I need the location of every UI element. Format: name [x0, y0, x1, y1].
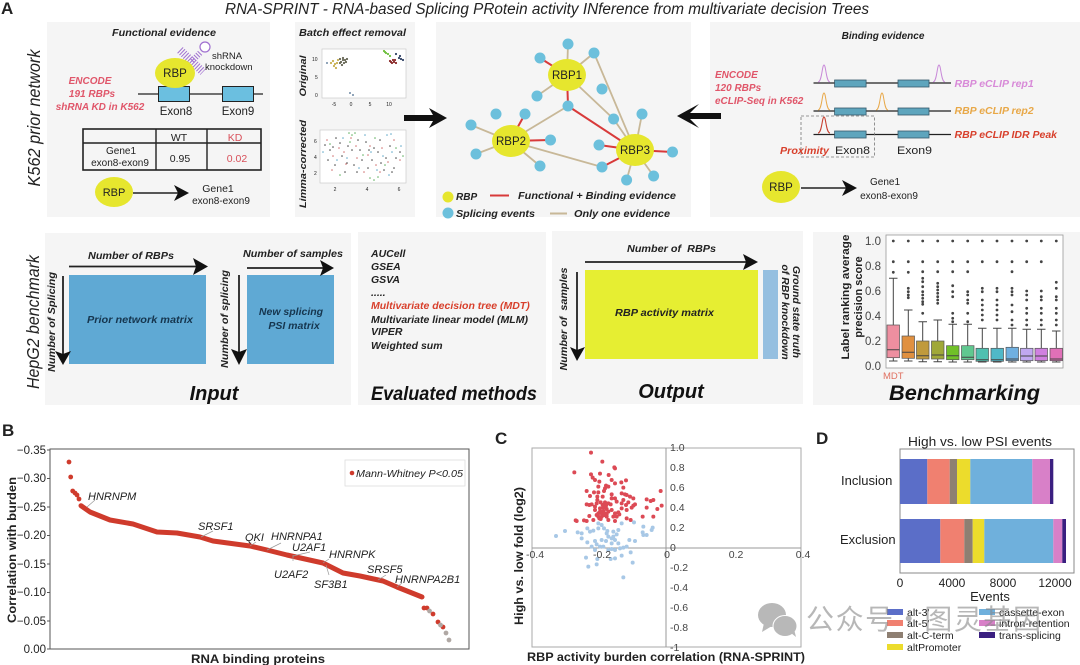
- scatter: original: 10: [312, 57, 318, 63]
- arrow: number of samples: Number of samples: [558, 267, 570, 370]
- method list: AUCell: [370, 248, 407, 260]
- arrow: number of splicing (right): [220, 270, 247, 368]
- arrow: number of samples: [558, 267, 585, 370]
- x axis ticks: 0: [664, 549, 670, 561]
- legend: alt-3': [907, 607, 929, 619]
- x axis label: Events: [970, 589, 1010, 604]
- method list: Weighted sum: [371, 340, 443, 352]
- y axis ticks: −0.05: [17, 616, 46, 628]
- y axis ticks: 0: [670, 542, 676, 554]
- scatter: limma-corrected: 4: [314, 155, 317, 161]
- panel: batch effect removal: [295, 22, 415, 217]
- ENCODE note: 120 RBPs: [715, 83, 762, 94]
- icon: chat bubbles: [758, 603, 797, 637]
- boxplot: [886, 235, 1063, 368]
- RBP3 node: RBP3: [620, 145, 650, 157]
- heading: benchmarking: Benchmarking: [889, 382, 1040, 405]
- arrow: number of splicing (left): Number of Splicing: [47, 272, 58, 372]
- arrow: number of samples: [243, 248, 343, 276]
- row label: HepG2 benchmark: HepG2 benchmark: [23, 254, 43, 389]
- panel: functional evidence: [47, 22, 270, 217]
- panel: functional evidence: Functional evidence: [112, 28, 216, 39]
- arrow: left to network: [404, 108, 447, 128]
- proximity box: Exon8: [835, 145, 870, 157]
- proximity box: Proximity: [780, 145, 830, 157]
- chart: activity vs fold scatter: [512, 442, 810, 664]
- arrow: number of RBPs: [69, 250, 208, 275]
- RBP2 node: RBP2: [496, 136, 526, 148]
- track labels: RBP eCLIP rep1: [954, 78, 1034, 90]
- arrow: number of RBPs: Number of RBPs: [627, 243, 716, 255]
- x axis ticks: -0.2: [593, 549, 611, 561]
- y axis ticks: 0.4: [865, 311, 882, 323]
- prior network matrix: Prior network matrix: [87, 314, 194, 326]
- new splicing PSI matrix: PSI matrix: [268, 320, 321, 332]
- arrow: number of RBPs: Number of RBPs: [88, 250, 174, 262]
- RBP2 node: [492, 125, 530, 157]
- y axis label: [840, 234, 865, 360]
- x axis ticks: 0.2: [729, 549, 743, 561]
- network legend: Functional + Binding evidence: [518, 191, 676, 202]
- y axis ticks: −0.35: [17, 445, 46, 457]
- gene labels: QKI: [245, 532, 264, 544]
- y axis ticks: 1.0: [670, 442, 685, 454]
- gene labels: SRSF1: [198, 521, 233, 533]
- ENCODE note: 191 RBPs: [69, 89, 116, 100]
- y axis ticks: 0.2: [865, 336, 881, 348]
- y axis label: Correlation with burden: [5, 477, 19, 623]
- scatter: limma-corrected: 4: [366, 187, 369, 193]
- y axis ticks: 0.0: [865, 361, 881, 373]
- y axis ticks: 0.8: [865, 261, 881, 273]
- PSI table: Gene1: [106, 146, 136, 157]
- scatter: limma-corrected: 6: [398, 187, 401, 193]
- x axis label: RBP activity burden correlation (RNA-SPRINT): [527, 650, 805, 664]
- scatter: original: 5: [369, 102, 372, 108]
- arrow: number of splicing (left): [47, 272, 71, 372]
- y axis label: precision score: [853, 256, 865, 338]
- gene labels: SRSF5: [367, 564, 403, 576]
- ground truth label: [779, 264, 802, 360]
- track labels: RBP eCLIP IDR Peak: [954, 129, 1058, 141]
- legend: alt-5': [907, 618, 929, 630]
- RBP to gene arrow: exon8-exon9: [860, 191, 918, 202]
- ENCODE note: ENCODE: [715, 70, 758, 81]
- legend: cassette-exon: [999, 607, 1065, 619]
- gene labels: U2AF1: [292, 542, 326, 554]
- panel: batch effect removal: Original: [298, 55, 309, 96]
- scatter: limma-corrected: [314, 130, 406, 193]
- eCLIP tracks: [814, 65, 951, 138]
- gene model with exons: Exon9: [222, 106, 254, 118]
- gene labels: HNRNPM: [88, 491, 137, 503]
- method list: VIPER: [371, 326, 403, 338]
- y axis ticks: 0.00: [24, 644, 46, 656]
- exclusion bar: [900, 519, 1066, 563]
- RBP oval: RBP: [163, 68, 187, 80]
- y axis ticks: -0.8: [670, 622, 688, 634]
- RBP to gene arrow: [95, 177, 250, 207]
- heading: input: Input: [190, 383, 240, 405]
- method list: Multivariate decision tree (MDT): [371, 300, 530, 312]
- heading: evaluated methods: Evaluated methods: [371, 384, 537, 405]
- arrow: number of RBPs: [585, 243, 758, 270]
- blue points: [556, 522, 653, 577]
- proximity box: [780, 116, 932, 157]
- y axis ticks: 0.4: [670, 502, 685, 514]
- panel: output: [552, 231, 803, 404]
- y axis ticks: -0.4: [670, 582, 688, 594]
- data points: [81, 506, 422, 597]
- RBP activity matrix: RBP activity matrix: [615, 307, 715, 319]
- legend: [887, 607, 1070, 654]
- title: RNA-SPRINT - RNA-based Splicing PRotein activity INference from multivariate decision Trees: [225, 1, 869, 18]
- ground truth label: of RBP knockdown: [779, 264, 791, 360]
- scatter: original: [312, 49, 406, 108]
- network legend: Only one evidence: [574, 209, 670, 220]
- panel: batch effect removal: Limma-corrected: [298, 120, 309, 208]
- y axis ticks: −0.25: [17, 502, 46, 514]
- panel: binding evidence: Binding evidence: [842, 31, 925, 42]
- row label: K562 prior network: K562 prior network: [24, 48, 44, 186]
- panel letter B: B: [2, 421, 14, 440]
- ENCODE note: shRNA KD in K562: [56, 102, 145, 113]
- panel: benchmarking: [813, 232, 1080, 405]
- scatter: original: -5: [332, 102, 336, 108]
- panel: input: [45, 233, 351, 405]
- scatter: original: 10: [386, 102, 392, 108]
- legend: alt-C-term: [907, 630, 954, 642]
- panel: RBP network: [436, 22, 691, 220]
- network legend: RBP: [456, 192, 477, 203]
- x axis ticks: 0: [897, 576, 904, 590]
- arrow: number of splicing (right): Number of splicing: [220, 270, 231, 368]
- panel: evaluated methods: [358, 232, 546, 405]
- RBP1 node: RBP1: [552, 70, 582, 82]
- panel: batch effect removal: Batch effect removal: [299, 28, 406, 39]
- PSI table: WT: [171, 132, 188, 144]
- y axis label: Label ranking average: [840, 234, 852, 360]
- proximity box: Exon9: [897, 145, 932, 157]
- PSI table: 0.02: [227, 153, 247, 165]
- y axis ticks: 0.2: [670, 522, 685, 534]
- RBP to gene arrow: RBP: [103, 187, 125, 199]
- heading: output: Output: [638, 381, 705, 403]
- scatter: original: 5: [315, 75, 318, 81]
- y axis ticks: -0.2: [670, 562, 688, 574]
- new splicing PSI matrix: [247, 275, 334, 364]
- x axis ticks: -0.4: [526, 549, 544, 561]
- track labels: RBP eCLIP rep2: [954, 105, 1034, 117]
- RBP to gene arrow: exon8-exon9: [192, 196, 250, 207]
- splicing event nodes: [466, 38, 678, 186]
- legend: Mann-Whitney P<0.05: [356, 468, 463, 480]
- RBP3 node: [616, 134, 654, 166]
- ENCODE note: eCLIP-Seq in K562: [715, 96, 804, 107]
- red points: [574, 453, 662, 521]
- y axis ticks: 1.0: [865, 236, 881, 248]
- panel letter C: C: [495, 429, 507, 448]
- y axis ticks: 0.8: [670, 462, 685, 474]
- y axis ticks: −0.15: [17, 559, 46, 571]
- x axis ticks: 0.4: [796, 549, 810, 561]
- method list: GSEA: [371, 261, 401, 273]
- legend: trans-splicing: [999, 630, 1061, 642]
- watermark: 公众号·图灵基因: [806, 598, 1041, 638]
- gene labels: SF3B1: [314, 579, 348, 591]
- gene labels: HNRNPA2B1: [395, 574, 460, 586]
- method list: Multivariate linear model (MLM): [371, 314, 528, 326]
- scatter: original: 0: [350, 102, 353, 108]
- gene model with exons: Exon8: [160, 106, 192, 118]
- arrow: right to network: [677, 104, 721, 128]
- shRNA label: knockdown: [205, 62, 253, 73]
- prior network matrix: [69, 275, 206, 364]
- ground truth bar: [763, 270, 778, 359]
- PSI table: KD: [228, 132, 243, 144]
- y axis ticks: -1: [670, 642, 679, 654]
- leader lines: [87, 500, 402, 587]
- category labels: Exclusion: [840, 532, 896, 547]
- gene labels: HNRNPK: [329, 549, 376, 561]
- gene model with exons: [138, 86, 263, 118]
- icon: shRNA hairpin: [180, 42, 210, 72]
- new splicing PSI matrix: New splicing: [259, 306, 324, 318]
- arrow: number of samples: Number of samples: [243, 248, 343, 260]
- red edges: [510, 58, 672, 167]
- method list: GSVA: [371, 274, 400, 286]
- inclusion bar: [900, 459, 1053, 504]
- chart: RBP correlation rank plot: [5, 445, 469, 665]
- ground truth label: Ground state truth: [790, 266, 802, 358]
- y axis ticks: −0.20: [17, 530, 46, 542]
- x axis ticks: 4000: [939, 576, 966, 590]
- y axis ticks: 0.6: [865, 286, 881, 298]
- scatter: limma-corrected: 2: [334, 187, 337, 193]
- chart: stacked bars of PSI events: [840, 434, 1074, 654]
- PSI table: 0.95: [170, 153, 190, 165]
- legend: [345, 460, 465, 486]
- y axis ticks: −0.10: [17, 587, 46, 599]
- panel letter D: D: [816, 429, 828, 448]
- x axis ticks: 12000: [1038, 576, 1072, 590]
- x axis ticks: 8000: [990, 576, 1017, 590]
- panel: binding evidence: [710, 22, 1080, 217]
- MDT label: MDT: [883, 371, 904, 382]
- category labels: Inclusion: [841, 473, 892, 488]
- y axis ticks: 0.6: [670, 482, 685, 494]
- PSI table: exon8-exon9: [91, 158, 149, 169]
- y axis label: High vs. low fold (log2): [512, 487, 526, 625]
- tan edges: [471, 44, 654, 180]
- PSI table: [83, 129, 261, 170]
- scatter: original: 0: [315, 93, 318, 99]
- network legend: [442, 191, 676, 220]
- RBP to gene arrow: [762, 171, 918, 203]
- legend: altPromoter: [907, 642, 962, 654]
- RBP to gene arrow: Gene1: [202, 183, 234, 195]
- gene labels: HNRNPA1: [271, 531, 323, 543]
- scatter: limma-corrected: 2: [314, 171, 317, 177]
- gene labels: U2AF2: [274, 569, 308, 581]
- shRNA label: shRNA: [212, 51, 243, 62]
- legend: intron-retention: [999, 618, 1070, 630]
- ENCODE note: ENCODE: [69, 76, 112, 87]
- method list: .....: [371, 287, 386, 299]
- y axis ticks: −0.30: [17, 473, 46, 485]
- RBP to gene arrow: Gene1: [870, 177, 900, 188]
- RBP1 node: [548, 59, 586, 91]
- network legend: Splicing events: [456, 209, 535, 220]
- RBP to gene arrow: RBP: [769, 182, 793, 194]
- chart: stacked bars of PSI events: High vs. low PSI events: [908, 434, 1053, 449]
- scatter: limma-corrected: 6: [314, 139, 317, 145]
- RBP oval: [155, 58, 195, 88]
- y axis ticks: -0.6: [670, 602, 688, 614]
- RBP activity matrix: [585, 270, 758, 359]
